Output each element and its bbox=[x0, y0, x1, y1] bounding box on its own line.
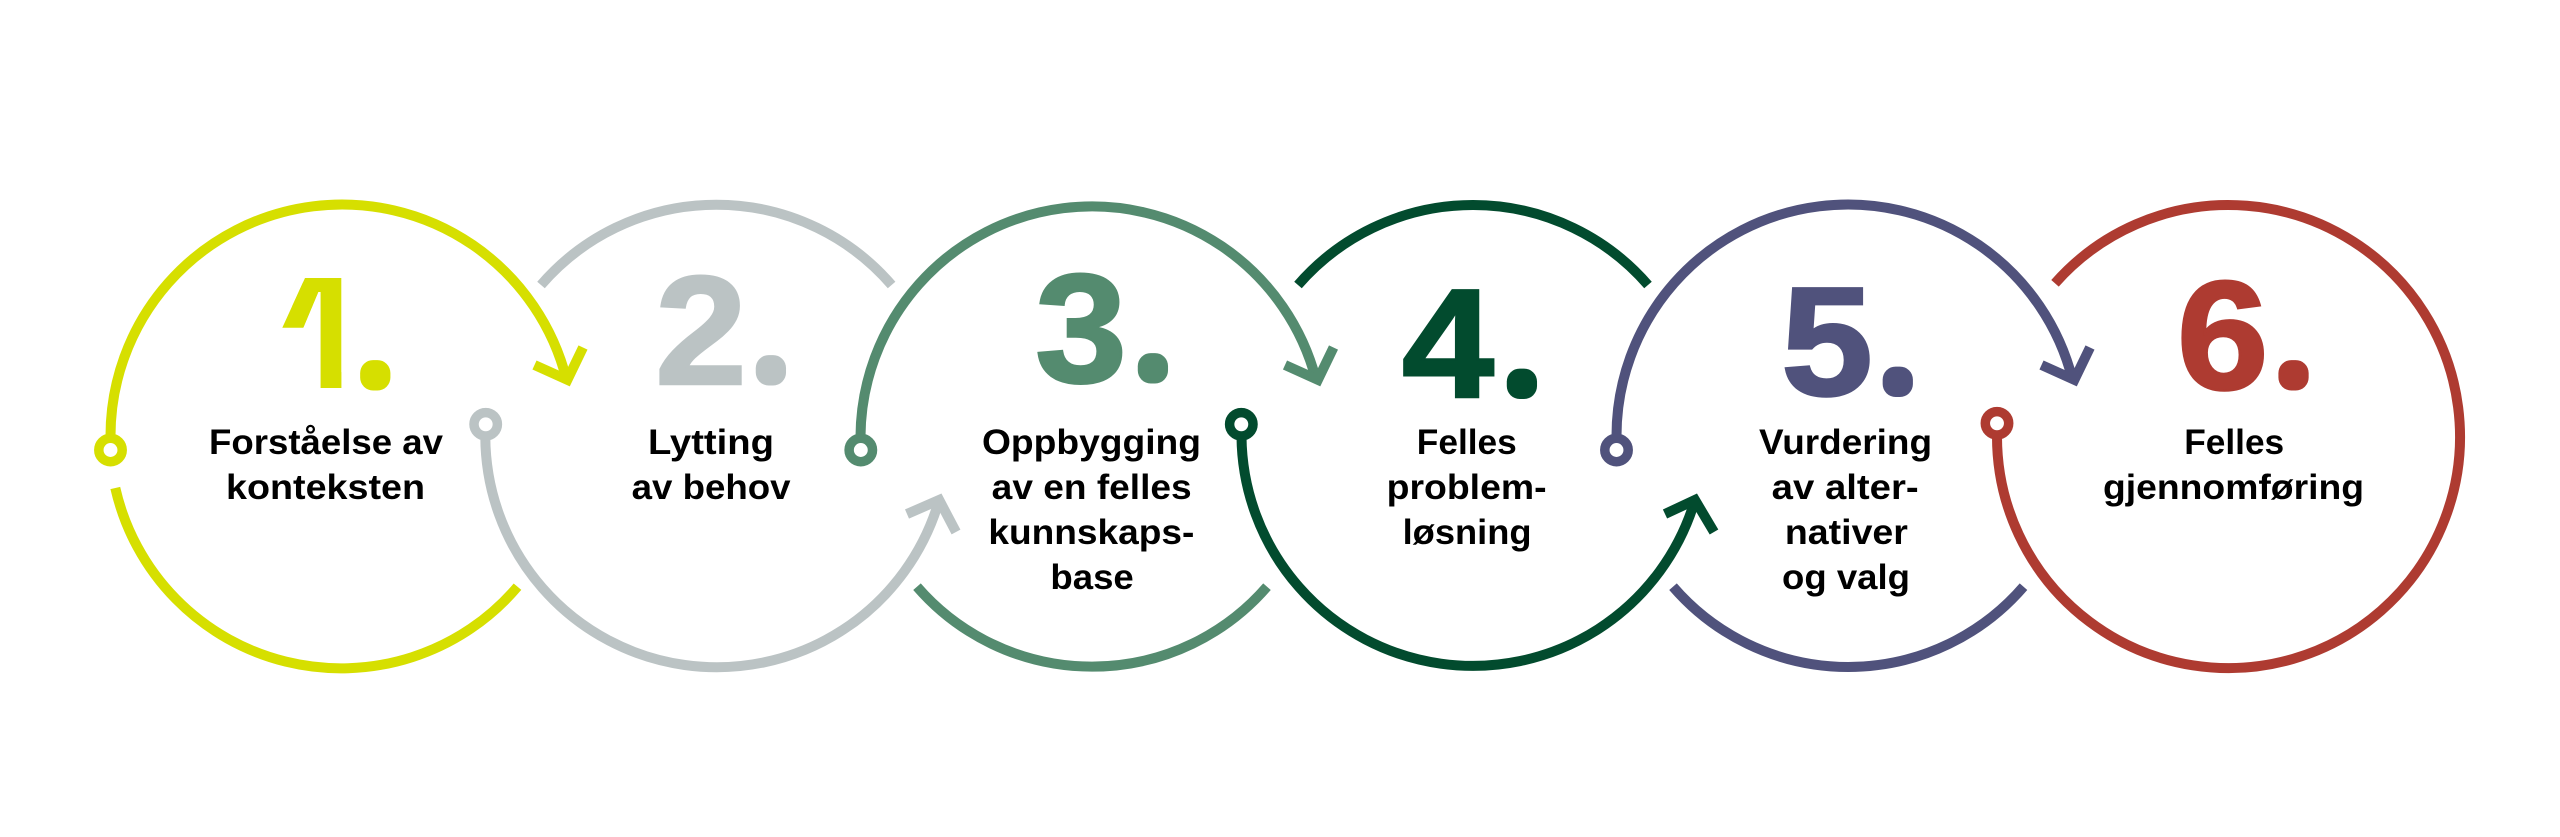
label, step 3: kunnskaps- bbox=[988, 513, 1194, 552]
step 4: Felles problemløsning bbox=[1230, 205, 1714, 666]
number 1: 1 bbox=[265, 248, 357, 421]
ring with arrow, step 5 bbox=[1605, 204, 2090, 667]
step 5: Vurdering av alternativer og valg bbox=[1605, 204, 2090, 667]
label, step 6 bbox=[2103, 423, 2364, 507]
label, step 3: base bbox=[1050, 558, 1134, 597]
step 1: Forståelse av konteksten bbox=[99, 204, 583, 668]
label, step 5: nativer bbox=[1785, 513, 1908, 552]
ring, step 6 bbox=[1985, 205, 2460, 668]
label, step 1: Forståelse av bbox=[209, 423, 444, 462]
number 1 bbox=[282, 278, 390, 390]
step 3: Oppbygging av en felles kunnskapsbase bbox=[849, 206, 1334, 667]
number 4: 4 bbox=[1402, 257, 1494, 430]
number 2: . bbox=[767, 347, 775, 380]
label, step 3: av en felles bbox=[992, 468, 1192, 507]
number 5: 5 bbox=[1781, 255, 1873, 428]
number 6: 6 bbox=[2177, 249, 2269, 422]
label, step 2: av behov bbox=[632, 468, 791, 507]
number 4 bbox=[1402, 257, 1526, 430]
number 4: . bbox=[1518, 360, 1526, 393]
label, step 3 bbox=[982, 423, 1201, 597]
label, step 4: problem- bbox=[1387, 468, 1547, 507]
ring with arrow, step 1 bbox=[99, 204, 583, 668]
number 1: . bbox=[371, 352, 379, 385]
label, step 6: gjennomføring bbox=[2103, 468, 2364, 507]
ring with arrow, step 4 bbox=[1230, 205, 1714, 666]
label, step 4: løsning bbox=[1403, 513, 1532, 552]
label, step 5: av alter- bbox=[1772, 468, 1919, 507]
step 6: Felles gjennomføring bbox=[1985, 205, 2460, 668]
number 5: . bbox=[1894, 358, 1902, 391]
label, step 2: Lytting bbox=[648, 423, 774, 462]
label, step 1 bbox=[209, 423, 444, 507]
label, step 5: og valg bbox=[1782, 558, 1910, 597]
number 6: . bbox=[2289, 352, 2298, 385]
label, step 4 bbox=[1387, 423, 1547, 552]
label, step 5: Vurdering bbox=[1759, 423, 1932, 462]
number 3: . bbox=[1149, 345, 1157, 378]
label, step 5 bbox=[1759, 423, 1932, 597]
step 2: Lytting av behov bbox=[474, 205, 956, 667]
label, step 4: Felles bbox=[1417, 423, 1517, 462]
number 3: 3 bbox=[1035, 242, 1127, 415]
label, step 1: konteksten bbox=[226, 468, 425, 507]
label, step 2 bbox=[632, 423, 791, 507]
ring with arrow, step 2 bbox=[474, 205, 956, 667]
ring with arrow, step 3 bbox=[849, 206, 1334, 667]
label, step 3: Oppbygging bbox=[982, 423, 1201, 462]
label, step 6: Felles bbox=[2184, 423, 2284, 462]
number 2: 2 bbox=[655, 244, 747, 417]
